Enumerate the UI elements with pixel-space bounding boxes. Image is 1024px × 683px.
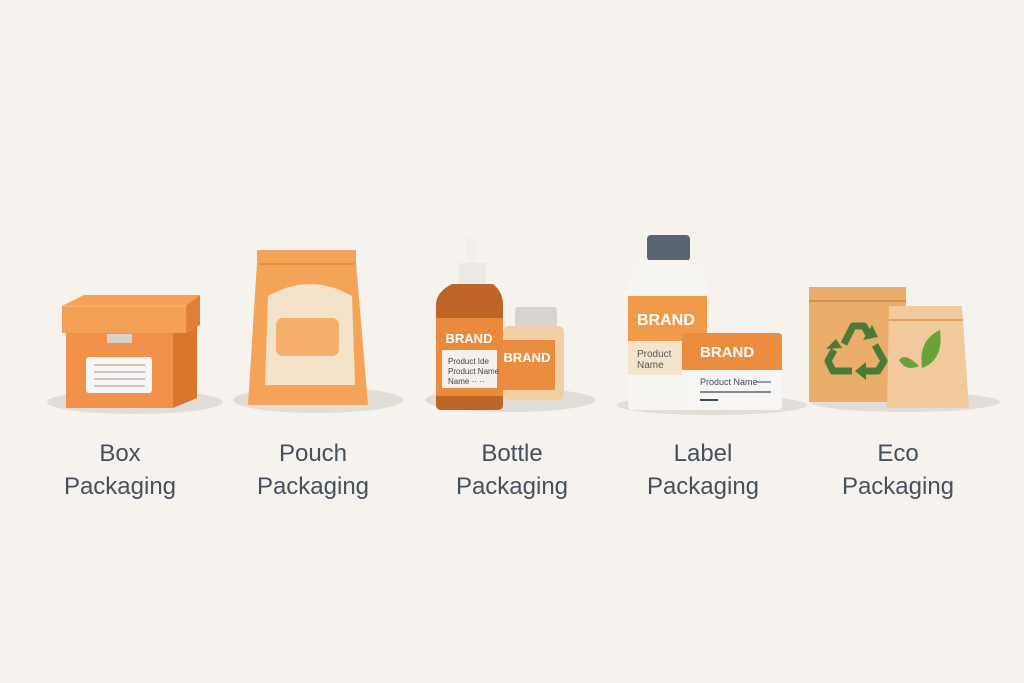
icon: bottle packaging: Product Ide	[448, 357, 489, 366]
label: eco packaging: Packaging	[842, 473, 954, 500]
icon: bottle packaging: BRAND	[446, 331, 492, 346]
label: eco packaging	[842, 440, 954, 500]
label: label packaging	[647, 440, 759, 500]
icon: eco packaging	[809, 287, 1000, 412]
label: bottle packaging: Bottle	[481, 440, 543, 467]
label: eco packaging: Eco	[877, 440, 919, 467]
label: bottle packaging: Packaging	[456, 473, 568, 500]
icon: label packaging: BRAND	[700, 344, 754, 361]
label: label packaging: Packaging	[647, 473, 759, 500]
icon: bottle packaging: Name ·· ··	[448, 377, 484, 386]
label: pouch packaging: Packaging	[257, 473, 369, 500]
icon: recycle symbol	[828, 326, 884, 371]
label: box packaging: Box	[99, 440, 141, 467]
label: bottle packaging	[456, 440, 568, 500]
icon: label packaging	[617, 235, 807, 415]
icon: pouch packaging	[233, 250, 403, 413]
icon: bottle packaging: Product Name	[448, 367, 500, 376]
icon: box packaging	[47, 295, 223, 414]
icon: label packaging: Product Name	[700, 377, 758, 387]
icon: bottle packaging	[425, 236, 595, 412]
label: box packaging: Packaging	[64, 473, 176, 500]
label: pouch packaging: Pouch	[279, 440, 347, 467]
label: box packaging	[64, 440, 176, 500]
label: label packaging: Label	[674, 440, 732, 467]
icon: bottle packaging: BRAND	[504, 350, 550, 365]
label: pouch packaging	[257, 440, 369, 500]
icon: label packaging: Name	[637, 360, 664, 371]
icon: label packaging: Product	[637, 349, 672, 360]
icon: label packaging: BRAND	[637, 312, 695, 329]
